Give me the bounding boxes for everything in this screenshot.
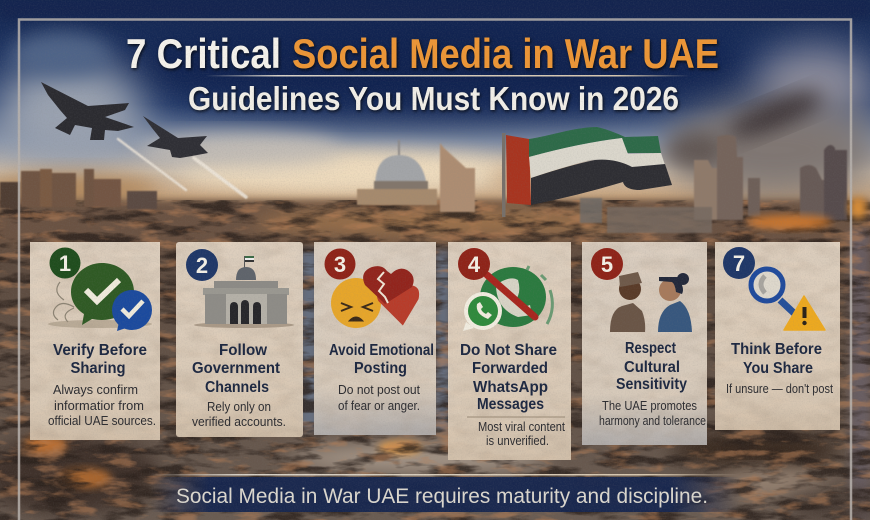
- body text: of fear or anger.: [338, 398, 420, 413]
- panel: 7 think before you share: [715, 242, 840, 430]
- fighter jet 1: [41, 82, 134, 140]
- UAE flag: [502, 127, 672, 217]
- icon: angry face: [331, 278, 381, 328]
- heading: Respect: [625, 340, 677, 357]
- body text: is unverified.: [486, 433, 549, 448]
- heading: Posting: [354, 360, 407, 377]
- body text: Most viral content: [478, 419, 565, 434]
- panel: 1 verify before sharing: [30, 242, 160, 440]
- heading: Cultural: [624, 359, 680, 376]
- title: [126, 30, 719, 117]
- icon: WhatsApp crossed out: [463, 266, 552, 331]
- heading: Do Not Share: [460, 342, 557, 359]
- heading: Sensitivity: [616, 376, 687, 393]
- badge 1: 1: [59, 251, 71, 276]
- body text: Do not post out: [338, 382, 420, 397]
- body text: [338, 382, 420, 413]
- heading: WhatsApp: [473, 379, 548, 396]
- body text: official UAE sources.: [48, 413, 156, 428]
- badge 2: 2: [196, 253, 208, 278]
- body text: [478, 419, 565, 448]
- heading: Government: [192, 360, 281, 377]
- heading: You Share: [743, 360, 813, 377]
- icon: government building: [194, 256, 294, 328]
- body text: [192, 399, 286, 429]
- heading: Messages: [477, 396, 544, 413]
- badge 7: [723, 247, 755, 279]
- heading: Channels: [205, 379, 269, 396]
- panel: 2 follow government channels: [176, 242, 303, 437]
- heading: Forwarded: [472, 360, 548, 377]
- panel: 3 avoid emotional posting: [314, 242, 436, 435]
- heading: Think Before: [731, 341, 822, 358]
- body text: [48, 382, 156, 428]
- icon: prohibition bar: [487, 275, 535, 317]
- skyline: left city: [0, 169, 157, 209]
- icon: magnifying glass: [751, 269, 796, 315]
- skyline: right city: [580, 135, 867, 233]
- icon: two people talking: [610, 272, 692, 332]
- body text: Rely only on: [207, 399, 271, 414]
- body text: The UAE promotes: [602, 398, 697, 413]
- landmark: tower: [440, 143, 475, 212]
- badge 5: 5: [601, 252, 613, 277]
- heading: Sharing: [70, 360, 126, 377]
- badge 5: [591, 248, 623, 280]
- title line 1 orange: Social Media in War UAE: [292, 30, 719, 77]
- heading: Verify Before: [53, 342, 147, 359]
- heading: Avoid Emotional: [329, 342, 434, 359]
- bottom banner: [150, 474, 740, 512]
- body text: If unsure — don't post: [726, 381, 833, 396]
- body text: informatior from: [54, 398, 144, 413]
- body text: [599, 398, 706, 428]
- icon: chat bubbles with checks: [48, 263, 152, 331]
- fighter jet 2: [143, 116, 208, 158]
- body text: verified accounts.: [192, 414, 286, 429]
- badge 3: [324, 248, 356, 280]
- badge 1: [50, 248, 80, 278]
- icon: warning triangle: [784, 296, 825, 330]
- icon: broken heart: [363, 266, 419, 326]
- panel: 4 do not share forwarded messages: [448, 242, 571, 460]
- badge 7: 7: [733, 251, 745, 276]
- title line 1 white: 7 Critical: [126, 30, 281, 77]
- jet contrails: [118, 139, 246, 197]
- badge 3: 3: [334, 252, 346, 277]
- heading: Follow: [219, 342, 268, 359]
- landmark: domed building: [357, 140, 437, 205]
- banner text: Social Media in War UAE requires maturity and discipline.: [176, 485, 708, 508]
- badge 4: [458, 248, 490, 280]
- badge 4: 4: [468, 252, 481, 277]
- body text: Always confirm: [53, 382, 138, 397]
- body text: harmony and tolerance: [599, 413, 706, 428]
- panel: 5 respect cultural sensitivity: [582, 242, 707, 445]
- title rule: [205, 75, 690, 76]
- title line 2: Guidelines You Must Know in 2026: [188, 80, 679, 117]
- badge 2: [186, 249, 218, 281]
